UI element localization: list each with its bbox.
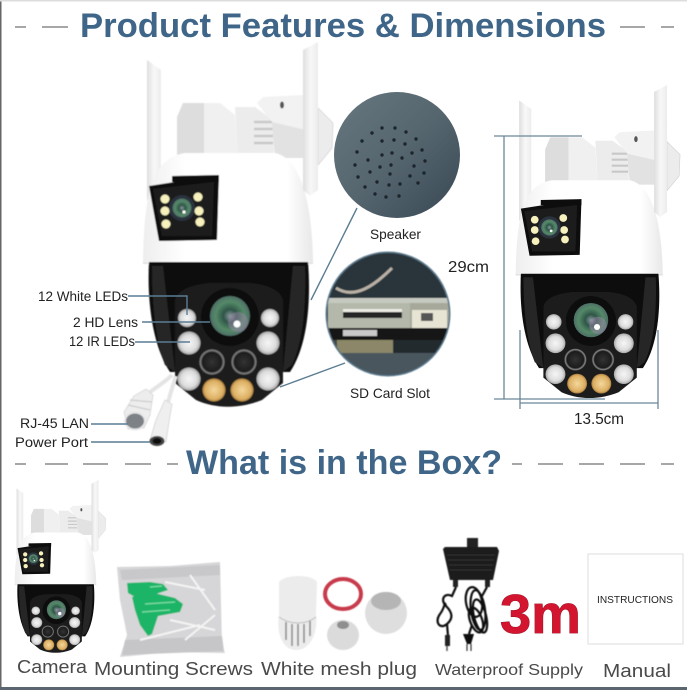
item: mounting screws bag xyxy=(117,562,225,657)
callout labels: left: 12 White LEDs xyxy=(38,289,128,304)
callout labels: left xyxy=(15,289,138,450)
callout labels: left: 12 IR LEDs xyxy=(69,334,135,349)
callout leader lines xyxy=(91,208,357,442)
label: speaker: Speaker xyxy=(370,226,421,242)
item labels xyxy=(17,657,671,681)
inset: sd card slot xyxy=(324,250,452,378)
main camera xyxy=(143,42,333,407)
label: sd card slot: SD Card Slot xyxy=(350,385,430,401)
callout labels: left: 2 HD Lens xyxy=(73,315,138,330)
item: white mesh plug xyxy=(278,576,407,650)
3m cable length: 3m xyxy=(500,583,581,645)
item labels: White mesh plug xyxy=(261,659,417,679)
item labels: Camera xyxy=(17,657,88,677)
item: waterproof power supply xyxy=(438,538,499,651)
title: product features and dimensions: Product Features & Dimensions xyxy=(80,7,606,45)
item: camera xyxy=(15,480,106,653)
callout labels: left: Power Port xyxy=(15,435,88,450)
item: instructions manual: INSTRUCTIONS xyxy=(597,594,673,606)
height label: 29cm xyxy=(448,259,489,276)
callout labels: left: RJ-45 LAN xyxy=(20,416,89,431)
dimension camera xyxy=(516,85,680,398)
width label: 13.5cm xyxy=(574,411,624,428)
heading: what is in the box: What is in the Box? xyxy=(186,444,502,482)
network and power cables xyxy=(124,375,176,446)
item: instructions manual xyxy=(588,554,683,644)
item labels: Manual xyxy=(603,661,671,681)
item labels: Waterproof Supply xyxy=(435,662,583,679)
inset: speaker xyxy=(334,92,460,218)
dimension lines xyxy=(494,136,658,409)
item labels: Mounting Screws xyxy=(94,659,253,679)
